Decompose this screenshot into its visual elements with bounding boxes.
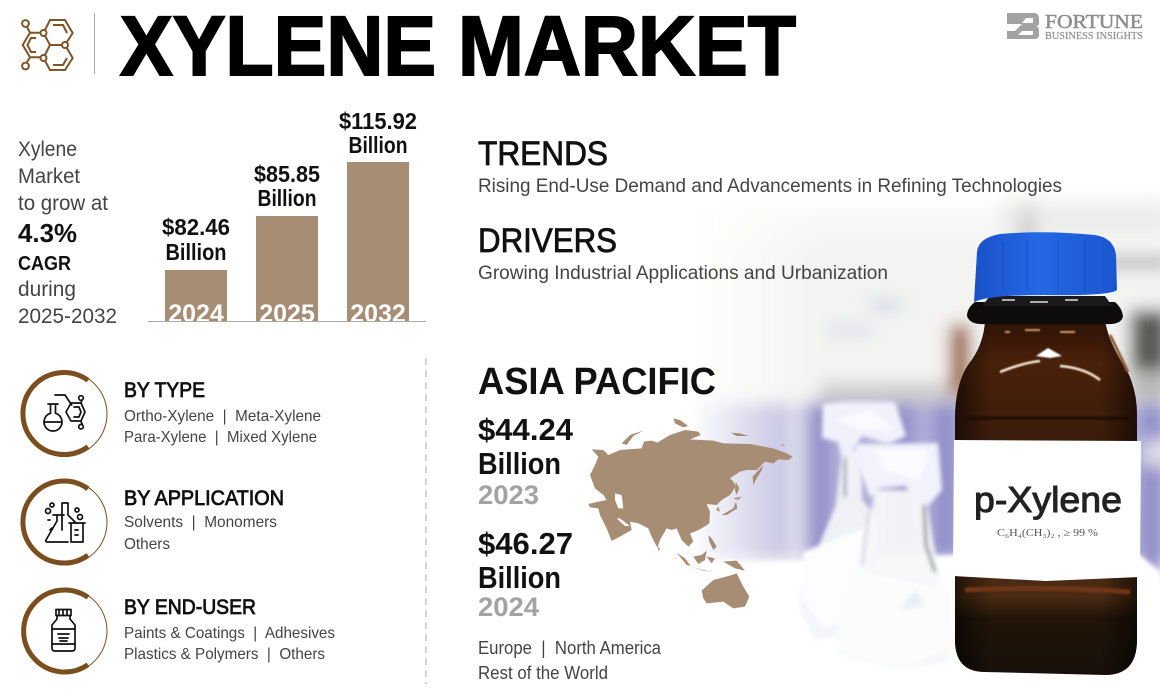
- segment list: Para-Xylene | Mixed Xylene: [124, 429, 317, 446]
- CAGR text block: Xylene: [18, 138, 77, 161]
- value 2024: [478, 526, 573, 622]
- bar 2024: [162, 214, 230, 328]
- value 2024: $46.27: [478, 526, 573, 561]
- CAGR text block: 4.3%: [18, 218, 77, 248]
- CAGR text block: to grow at: [18, 192, 108, 215]
- value 2023: [478, 412, 574, 510]
- bar 2024: $82.46: [162, 214, 230, 240]
- heading: BY APPLICATION: [124, 487, 284, 510]
- segment list: [124, 408, 321, 446]
- bar 2032: Billion: [348, 132, 408, 158]
- bar 2032: 2032: [350, 300, 406, 328]
- bar chart: market size: [148, 108, 426, 328]
- segment list: Others: [124, 536, 170, 553]
- other regions: [478, 638, 662, 683]
- trends block: Rising End-Use Demand and Advancements in Refining Technologies: [478, 176, 1062, 197]
- segment: by type: [22, 372, 321, 456]
- value 2023: 2023: [478, 480, 539, 510]
- drivers block: [478, 222, 888, 284]
- segment list: Plastics & Polymers | Others: [124, 646, 325, 663]
- title block: [22, 0, 796, 93]
- drivers block: Growing Industrial Applications and Urbanization: [478, 263, 888, 284]
- segment list: [124, 514, 277, 553]
- flask: back: [800, 402, 906, 640]
- CAGR text block: Market: [18, 165, 80, 188]
- CAGR text block: during: [18, 278, 76, 301]
- segment list: [124, 625, 335, 663]
- segment: by application: [22, 480, 284, 565]
- ring: [22, 372, 107, 456]
- ring: [22, 588, 107, 674]
- heading: BY TYPE: [124, 379, 205, 402]
- bottle body: [955, 320, 1137, 675]
- icon: molecule logo: [22, 20, 73, 70]
- value 2024: 2024: [478, 592, 539, 622]
- label: formula: C₆H₄(CH₃)₂ , ≥ 99 %: [997, 528, 1098, 539]
- bar 2025: Billion: [258, 185, 316, 211]
- logo: Fortune Business Insights: FORTUNE: [1045, 11, 1143, 33]
- bar 2025: $85.85: [254, 161, 320, 187]
- drivers block: DRIVERS: [478, 222, 617, 260]
- CAGR text block: 2025-2032: [18, 305, 117, 328]
- bottle cap: [974, 232, 1117, 302]
- value 2024: Billion: [478, 560, 561, 595]
- background photo: laboratory: [560, 170, 1160, 700]
- segment list: Paints & Coatings | Adhesives: [124, 625, 335, 642]
- other regions: Rest of the World: [478, 663, 608, 683]
- icon: bottle: [52, 610, 75, 651]
- CAGR text block: [18, 138, 117, 328]
- CAGR text block: CAGR: [18, 253, 71, 275]
- value 2023: Billion: [478, 446, 561, 481]
- bar 2032: $115.92: [339, 108, 417, 134]
- segment list: Solvents | Monomers: [124, 514, 277, 531]
- bottle neck ring: [967, 302, 1123, 324]
- value 2023: $44.24: [478, 412, 574, 447]
- label: p-Xylene: p-Xylene: [974, 479, 1122, 520]
- bottle label: [953, 440, 1141, 581]
- segment: by end-user: [22, 588, 335, 674]
- bar 2025: [254, 161, 320, 328]
- icon: lab glassware: [46, 503, 85, 542]
- flask: front: [835, 443, 955, 670]
- bar 2024: Billion: [166, 239, 226, 265]
- segment list: Ortho-Xylene | Meta-Xylene: [124, 408, 321, 425]
- trends block: [478, 135, 1062, 197]
- regional block: Asia Pacific: [478, 361, 716, 683]
- other regions: Europe | North America: [478, 638, 662, 658]
- trends block: TRENDS: [478, 135, 608, 173]
- title text: XYLENE MARKET: [120, 0, 796, 93]
- bar 2024: 2024: [168, 300, 224, 328]
- icon: FB mark: [1007, 13, 1039, 39]
- icon: flask and molecule: [44, 395, 85, 431]
- heading: BY END-USER: [124, 596, 256, 619]
- logo: Fortune Business Insights: BUSINESS INSIGHTS: [1045, 31, 1143, 42]
- bar 2025: 2025: [259, 300, 315, 328]
- bottle: [953, 232, 1141, 675]
- map: Asia Pacific: [588, 418, 793, 608]
- regional block: Asia Pacific: ASIA PACIFIC: [478, 361, 716, 403]
- logo: Fortune Business Insights: [1007, 11, 1143, 42]
- bar 2032: [339, 108, 417, 328]
- ring: [22, 480, 107, 565]
